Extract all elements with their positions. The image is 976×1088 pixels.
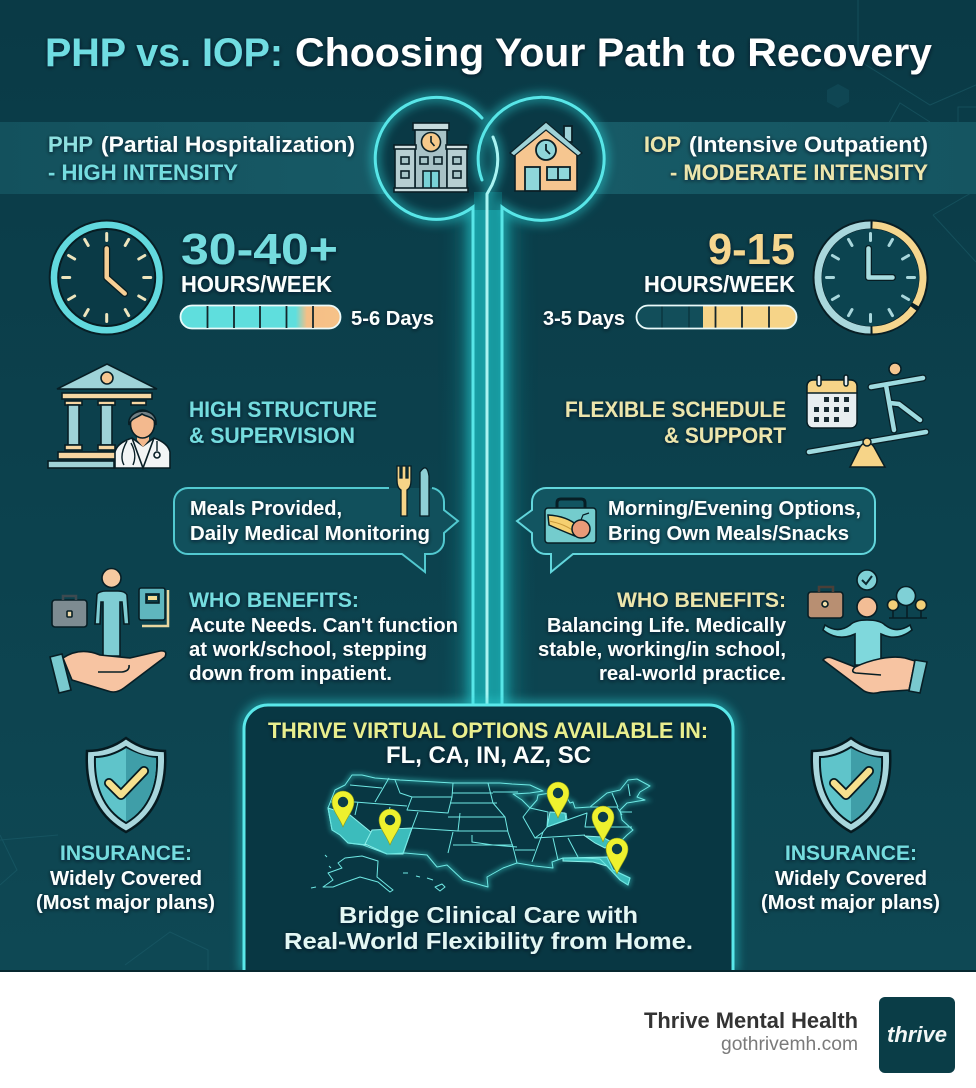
who benefits IOP text: real-world practice. <box>599 663 786 685</box>
location pins <box>332 782 628 874</box>
highlighted states <box>328 808 630 885</box>
IOP hours: 9-15 <box>708 225 795 274</box>
title <box>45 31 933 75</box>
title: PHP vs. IOP: <box>45 31 283 75</box>
icon: temple and doctor <box>48 364 170 468</box>
icon: calendar and balance figure <box>807 363 926 467</box>
PHP hours <box>181 225 338 297</box>
who benefits PHP text: Acute Needs. Can't function <box>189 615 458 637</box>
state list: FL, CA, IN, AZ, SC <box>386 742 591 769</box>
insurance IOP text: (Most major plans) <box>761 892 940 914</box>
footer url: gothrivemh.com <box>721 1034 858 1055</box>
footer <box>0 970 976 1088</box>
callout: PHP meals and monitoring: Meals Provided, <box>190 498 342 520</box>
panel heading: THRIVE VIRTUAL OPTIONS AVAILABLE IN: <box>268 718 708 743</box>
who benefits PHP text <box>189 589 458 685</box>
flexible schedule text: & SUPPORT <box>664 423 787 448</box>
PHP band text: PHP <box>48 132 93 157</box>
state outlines <box>328 775 650 887</box>
PHP hours: 30-40+ <box>181 225 338 274</box>
central connector glow <box>462 195 514 710</box>
connector: circles and centre lines <box>375 97 604 705</box>
who benefits IOP text: Balancing Life. Medically <box>547 615 787 637</box>
who benefits PHP text: down from inpatient. <box>189 663 392 685</box>
Alaska and Hawaii <box>311 855 445 892</box>
who benefits IOP text: WHO BENEFITS: <box>617 589 786 612</box>
icon: lunch bag <box>545 499 596 543</box>
icon circle backgrounds <box>376 97 603 705</box>
insurance IOP text: INSURANCE: <box>785 842 917 865</box>
icon: person balancing on hand <box>808 570 927 693</box>
who benefits IOP text: stable, working/in school, <box>538 639 786 661</box>
icon: shield right <box>812 738 890 832</box>
IOP band text: IOP <box>644 132 681 157</box>
who benefits IOP text <box>538 589 787 685</box>
panel tagline: Real-World Flexibility from Home. <box>284 928 693 954</box>
IOP band text: - MODERATE INTENSITY <box>670 160 928 185</box>
IOP band text <box>644 132 928 185</box>
PHP hours: HOURS/WEEK <box>181 271 332 297</box>
callout: IOP schedule and meals: Bring Own Meals/Snacks <box>608 523 849 545</box>
who benefits PHP text: at work/school, stepping <box>189 639 427 661</box>
flexible schedule text <box>565 397 787 448</box>
high structure text: HIGH STRUCTURE <box>189 397 377 422</box>
panel: virtual options <box>244 705 733 972</box>
high structure text: & SUPERVISION <box>189 423 355 448</box>
icon: shield left <box>87 738 165 832</box>
logo: thrive <box>887 1022 947 1047</box>
title: Choosing Your Path to Recovery <box>295 31 933 75</box>
PHP band text: (Partial Hospitalization) <box>101 132 355 157</box>
insurance PHP text: INSURANCE: <box>60 842 192 865</box>
IOP days label: 3-5 Days <box>543 308 625 330</box>
IOP band text: (Intensive Outpatient) <box>689 132 928 157</box>
callout: PHP meals and monitoring <box>174 466 458 572</box>
icon: person on hand with briefcase and book <box>50 568 168 693</box>
panel tagline: Bridge Clinical Care with <box>339 902 638 928</box>
insurance PHP text: (Most major plans) <box>36 892 215 914</box>
heading bands <box>0 122 976 194</box>
icon: IOP clock <box>812 220 928 336</box>
insurance PHP text: Widely Covered <box>50 868 202 890</box>
icon: house <box>510 122 582 191</box>
high structure text <box>189 397 377 448</box>
insurance IOP text: Widely Covered <box>775 868 927 890</box>
map glow <box>328 775 650 887</box>
icon: fork and knife <box>397 466 429 516</box>
US map <box>311 775 650 892</box>
panel tagline <box>284 902 693 954</box>
flexible schedule text: FLEXIBLE SCHEDULE <box>565 397 786 422</box>
PHP band text: - HIGH INTENSITY <box>48 160 238 185</box>
callout: IOP schedule and meals <box>517 488 875 572</box>
icon: PHP clock <box>49 220 165 336</box>
callout: IOP schedule and meals: Morning/Evening Options, <box>608 498 861 520</box>
PHP days bar <box>180 306 340 328</box>
insurance IOP text <box>761 842 940 914</box>
IOP hours: HOURS/WEEK <box>644 271 795 297</box>
insurance PHP text <box>36 842 215 914</box>
logo <box>879 997 955 1073</box>
IOP hours <box>644 225 795 297</box>
PHP days label: 5-6 Days <box>351 308 434 330</box>
IOP days bar <box>636 306 796 328</box>
footer brand name: Thrive Mental Health <box>644 1008 858 1033</box>
callout: PHP meals and monitoring: Daily Medical Monitoring <box>190 523 430 545</box>
who benefits PHP text: WHO BENEFITS: <box>189 589 359 612</box>
icon: hospital <box>394 123 468 192</box>
PHP band text <box>48 132 355 185</box>
